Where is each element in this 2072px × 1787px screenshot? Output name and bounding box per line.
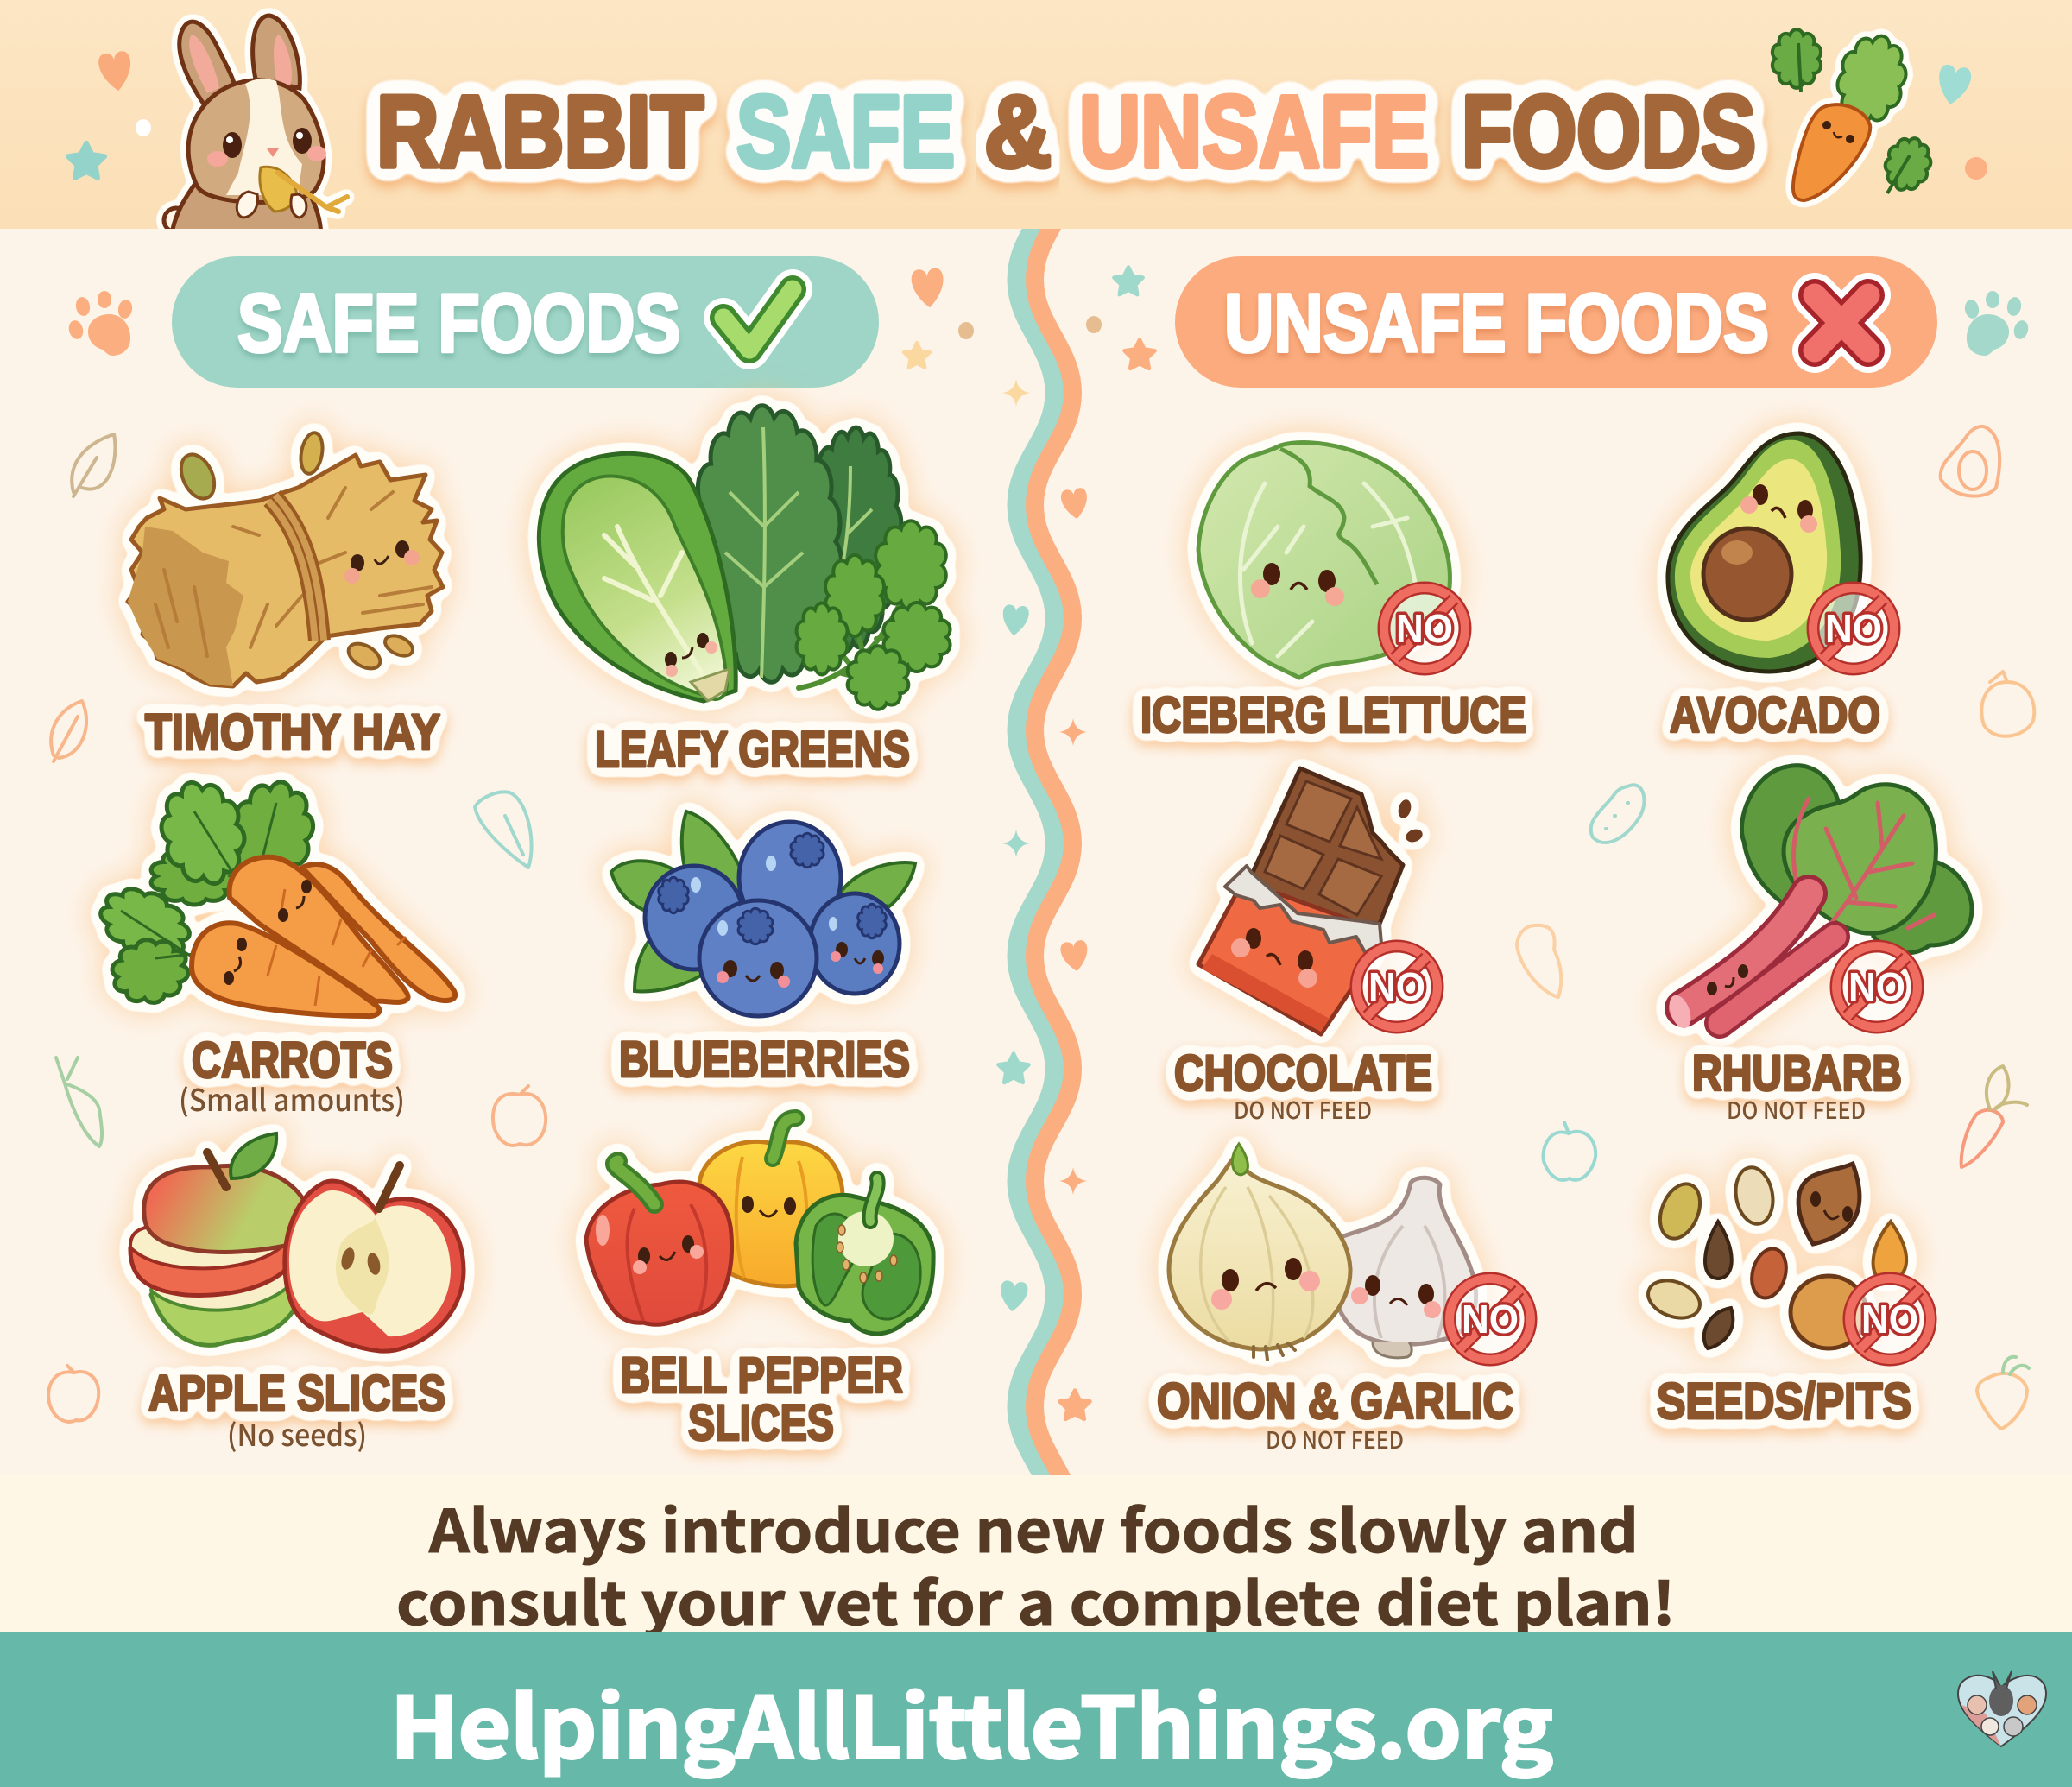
- hay bundle: [260, 167, 297, 212]
- avocado skin: [1668, 433, 1860, 672]
- doodle: turnip: [1977, 1357, 2029, 1429]
- panel: safe foods: [48, 256, 974, 1455]
- front carrot: [192, 923, 380, 1016]
- doodle: lettuce outline: [475, 792, 532, 868]
- avocado face: [1740, 484, 1817, 533]
- label: iceberg lettuce: ICEBERG LETTUCE: [1140, 687, 1526, 743]
- badge: no: [1356, 946, 1437, 1027]
- left blueberry: [645, 866, 743, 969]
- note: small amounts: (Small amounts): [179, 1077, 405, 1121]
- safe foods heading pill: [172, 256, 879, 388]
- wave decorations: [999, 379, 1090, 1419]
- apples sticker: [130, 1133, 464, 1351]
- title word: SAFE: SAFE: [736, 75, 955, 189]
- green apple base: [151, 1269, 298, 1345]
- lettuce fold: [1280, 449, 1377, 584]
- label: blueberries: BLUEBERRIES: [619, 1032, 910, 1088]
- title word: RABBIT: RABBIT: [376, 75, 704, 189]
- romaine back leaf: [539, 453, 736, 701]
- apple seeds: [339, 1247, 357, 1271]
- blueberry faces: [717, 942, 884, 988]
- onion garlic sticker: [1169, 1144, 1476, 1360]
- icon: bunny eating hay: [164, 16, 347, 237]
- note: do not feed: DO NOT FEED: [1727, 1092, 1866, 1126]
- chocolate crumbs: [1396, 799, 1413, 819]
- logo: heart of small animals: [1958, 1671, 2046, 1746]
- cream bean: [1643, 1274, 1705, 1324]
- badge: no: NO: [1462, 1297, 1519, 1342]
- almond face: [1810, 1191, 1853, 1222]
- food: timothy hay: [128, 431, 443, 761]
- wrapper side shading: [1202, 954, 1330, 1032]
- label: chocolate: CHOCOLATE: [1174, 1045, 1432, 1102]
- cilantro leaves: [875, 521, 946, 610]
- food: bell pepper slices: [586, 1118, 933, 1451]
- food: blueberries: [611, 811, 915, 1088]
- rhubarb veins: [1794, 799, 1934, 945]
- bunny paws: [237, 192, 306, 218]
- yellow pepper ridges: [736, 1157, 806, 1282]
- onion lines: [1201, 1187, 1313, 1347]
- carrot greens: [151, 848, 237, 905]
- badge: no: [1813, 588, 1894, 669]
- badge: no: [1836, 946, 1917, 1027]
- hay seed leaf top: [298, 431, 325, 476]
- advice text: [396, 1484, 1676, 1642]
- unsafe foods heading text: UNSAFE FOODS: [1224, 277, 1769, 369]
- title word: UNSAFE: UNSAFE: [1079, 75, 1429, 189]
- carrot faces: [224, 880, 312, 985]
- middle carrot: [230, 857, 408, 1002]
- hay face: [344, 540, 420, 584]
- blueberry leaves: [682, 811, 751, 898]
- onion bulb: [1169, 1157, 1350, 1349]
- seeds sticker: [1643, 1164, 1906, 1348]
- chocolate squares: [1265, 781, 1381, 915]
- label: rhubarb: RHUBARB: [1692, 1045, 1902, 1102]
- hay cut end: [128, 527, 243, 686]
- hay bundle body: [128, 455, 443, 686]
- red pepper stem: [615, 1161, 654, 1204]
- greens veins: [121, 803, 276, 958]
- onion and garlic faces: [1211, 1258, 1441, 1318]
- front blueberry: [699, 900, 817, 1016]
- doodle: apple lower left: [48, 1366, 98, 1422]
- hay seed leaf left: [174, 449, 221, 504]
- title word: FOODS: FOODS: [1462, 75, 1756, 189]
- front kale: [688, 403, 845, 685]
- note: do not feed: DO NOT FEED: [1234, 1092, 1372, 1126]
- apple stem: [207, 1152, 226, 1187]
- kale ribs: [725, 427, 872, 678]
- title: [376, 75, 1756, 189]
- icon: teal paw print: [1963, 291, 2031, 356]
- chocolate foil: [1225, 866, 1381, 952]
- garlic roots: [1373, 1342, 1412, 1358]
- decor: header heart: [98, 50, 135, 93]
- chocolate bar: [1251, 768, 1403, 924]
- avocado sticker: [1668, 433, 1860, 672]
- advice text: Always introduce new foods slowly and: [428, 1484, 1639, 1569]
- decor: header star: [68, 143, 104, 178]
- peppers sticker: [586, 1118, 933, 1334]
- advice text: consult your vet for a complete diet plan!: [396, 1557, 1676, 1642]
- apple leaf: [231, 1133, 276, 1178]
- avocado flesh yellow: [1690, 459, 1827, 641]
- cut apple outer: [285, 1181, 464, 1351]
- label: leafy greens: LEAFY GREENS: [595, 722, 910, 778]
- cream slice upper: [130, 1226, 285, 1268]
- lettuce face: [1251, 563, 1344, 606]
- bunny nose: [267, 148, 279, 157]
- cut apple stem: [379, 1165, 400, 1209]
- badge: no: NO: [1396, 606, 1453, 651]
- blueberries sticker: [611, 811, 915, 1016]
- doodle: apple orange: [493, 1086, 546, 1146]
- icon: green check mark: [723, 289, 793, 350]
- romaine front leaf: [563, 477, 727, 699]
- rhubarb stalk back: [1720, 937, 1835, 1023]
- food: avocado: [1668, 433, 1894, 743]
- onion roots: [1254, 1343, 1295, 1360]
- footer band: [0, 1632, 2072, 1787]
- avocado flesh green: [1675, 440, 1841, 658]
- bunny white blaze: [226, 79, 302, 195]
- title word: &: &: [984, 75, 1052, 189]
- dark seed lower: [1704, 1308, 1733, 1348]
- food: leafy greens: [539, 403, 951, 778]
- bunny left ear: [180, 22, 235, 105]
- lettuce veins: [1240, 483, 1416, 656]
- label: apple slices: APPLE SLICES: [148, 1366, 445, 1422]
- badge: no: NO: [1825, 606, 1882, 651]
- blueberry crowns: [791, 833, 824, 868]
- bunny body: [171, 181, 321, 237]
- yellow pepper: [699, 1141, 843, 1286]
- lettuce head: [1198, 443, 1450, 678]
- red slice: [130, 1226, 287, 1295]
- green pepper cavities: [812, 1214, 856, 1305]
- icon: red cross: [1815, 295, 1868, 350]
- decor: stars near unsafe pill: [1086, 267, 1154, 369]
- doodle: potato: [1591, 785, 1644, 843]
- green pepper stem: [870, 1178, 878, 1222]
- garlic cloves: [1374, 1226, 1444, 1338]
- doodle: oak leaf: [51, 701, 86, 761]
- decor: header dot: [136, 119, 151, 136]
- orange seed: [1873, 1222, 1906, 1282]
- label: carrots: CARROTS: [192, 1032, 393, 1089]
- rhubarb front leaf: [1784, 785, 1936, 933]
- yellow seed: [1652, 1178, 1708, 1244]
- note: no seeds: (No seeds): [227, 1411, 367, 1455]
- bunny right ear: [253, 16, 300, 88]
- decor: header teal heart: [1935, 64, 1973, 107]
- rhubarb left back leaf: [1741, 766, 1841, 911]
- red pepper ridges: [627, 1204, 706, 1321]
- label: seeds and pits: SEEDS/PITS: [1657, 1373, 1911, 1430]
- label: bell pepper slices: SLICES: [688, 1395, 834, 1451]
- safe foods heading text: SAFE FOODS: [237, 277, 680, 369]
- large nut: [1791, 1276, 1867, 1348]
- carrots sticker: [91, 773, 455, 1016]
- green pepper half: [796, 1195, 933, 1334]
- decor: header orange dot: [1965, 157, 1987, 180]
- food: onion and garlic: [1157, 1144, 1531, 1455]
- badge: no: [1384, 588, 1465, 669]
- chocolate sticker: [1198, 768, 1424, 1034]
- carrot creases: [268, 889, 406, 1006]
- advice note band: [0, 1475, 2072, 1642]
- chocolate wrapper: [1198, 894, 1380, 1034]
- carrot sticker: [1793, 28, 1914, 200]
- rhubarb face: [1707, 964, 1748, 995]
- reddish seed: [1747, 1245, 1791, 1302]
- doodle: leaf outline: [72, 434, 115, 496]
- badge: no: NO: [1861, 1297, 1918, 1342]
- bunny head: [188, 80, 324, 202]
- romaine rib: [604, 527, 712, 691]
- cilantro stem: [799, 570, 915, 688]
- doodle: small carrot: [56, 1058, 102, 1146]
- rhubarb stalk front: [1684, 894, 1809, 1008]
- food: rhubarb: [1665, 766, 1972, 1126]
- badge: no: NO: [1848, 964, 1905, 1009]
- apple top half: [144, 1165, 308, 1252]
- website url: HelpingAllLittleThings.org: [390, 1660, 1553, 1782]
- onion sprout: [1232, 1144, 1248, 1175]
- hay sticker: [128, 431, 443, 686]
- garlic bulb: [1330, 1178, 1476, 1344]
- food: iceberg lettuce: [1140, 443, 1526, 743]
- hay tie: [272, 498, 319, 641]
- hay twig: [278, 173, 347, 212]
- badge: no: NO: [1368, 964, 1425, 1009]
- icon: header carrot with leaves: [1772, 28, 1936, 200]
- badge: no: [1450, 1279, 1531, 1360]
- bunny right ear inside: [274, 35, 292, 86]
- header band: [0, 0, 2072, 229]
- cream seed: [1732, 1165, 1777, 1227]
- pepper faces: [633, 1196, 796, 1274]
- parsley leaf top: [1772, 29, 1821, 92]
- red pepper: [586, 1182, 732, 1324]
- decor: hearts and stars near safe pill: [904, 268, 974, 368]
- cream slice lower: [151, 1252, 298, 1310]
- doodle: peach ghost outline: [1517, 925, 1561, 997]
- hay strands: [155, 488, 432, 656]
- note: do not feed: DO NOT FEED: [1266, 1422, 1404, 1455]
- chocolate face: [1231, 928, 1317, 988]
- label: bell pepper slices: BELL PEPPER: [621, 1348, 903, 1404]
- label: timothy hay: TIMOTHY HAY: [145, 704, 440, 761]
- greens sticker: [539, 403, 951, 710]
- food: seeds and pits: [1643, 1164, 1930, 1430]
- cut apple flesh: [289, 1190, 451, 1336]
- doodle: teal apple: [1543, 1122, 1595, 1180]
- bunny eyes: [223, 128, 312, 158]
- almond: [1798, 1164, 1860, 1244]
- yellow pepper stem: [773, 1118, 796, 1159]
- unsafe foods heading pill: [1175, 256, 1937, 388]
- back kale: [794, 425, 906, 654]
- food: apple slices: [130, 1133, 464, 1455]
- bunny cheeks: [207, 146, 326, 167]
- hay grains: [344, 639, 384, 673]
- divider wave: [1017, 167, 1072, 1519]
- badge: no: [1849, 1279, 1930, 1360]
- right blueberry: [810, 894, 900, 994]
- food: carrots: [91, 773, 455, 1121]
- dark teardrop seed: [1705, 1222, 1732, 1279]
- rhubarb right back leaf: [1865, 860, 1972, 953]
- pepper seeds: [837, 1225, 897, 1283]
- panel: unsafe foods: [1086, 256, 2034, 1455]
- food: chocolate: [1174, 768, 1437, 1126]
- blueberry highlights: [691, 856, 837, 936]
- label: onion and garlic: ONION & GARLIC: [1157, 1373, 1513, 1430]
- green pepper core: [838, 1211, 894, 1266]
- label: avocado: AVOCADO: [1670, 687, 1880, 743]
- back blueberry: [739, 822, 841, 934]
- back carrot: [302, 864, 455, 1001]
- apple core shading: [336, 1217, 388, 1315]
- doodle: avocado outline: [1941, 426, 1999, 496]
- parsley leaf lower: [1879, 132, 1936, 196]
- avocado pit: [1703, 528, 1791, 620]
- bunny left ear inside: [189, 35, 219, 93]
- rhubarb sticker: [1665, 766, 1972, 1032]
- greens face: [665, 633, 717, 677]
- doodle: coral carrot: [1961, 1066, 2027, 1167]
- lettuce sticker: [1198, 443, 1450, 678]
- bunny tail: [164, 208, 188, 232]
- doodle: orange fruit: [1981, 672, 2034, 736]
- label: bell pepper slices: [621, 1348, 903, 1451]
- icon: paw print: [66, 291, 134, 356]
